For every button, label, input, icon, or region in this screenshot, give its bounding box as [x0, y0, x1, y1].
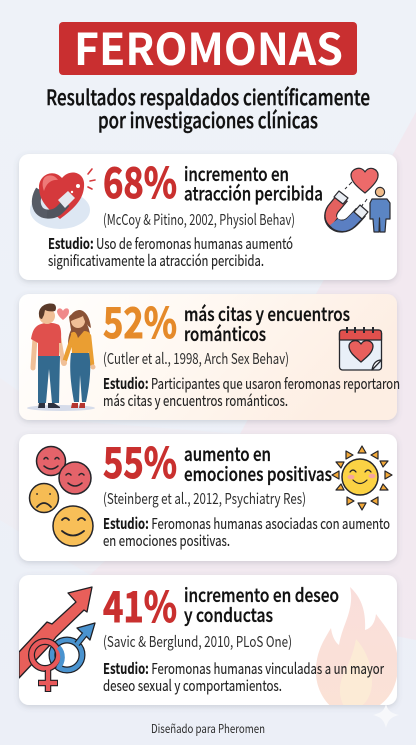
- subtitle: por investigaciones clínicas: [98, 105, 318, 135]
- heading: incremento en deseo: [184, 581, 339, 608]
- icon: magnet attracting heart to person: [331, 168, 390, 232]
- citation: (Steinberg et al., 2012, Psychiatry Res): [103, 488, 306, 509]
- study text: significativamente la atracción percibida.: [48, 250, 264, 271]
- stat: 55%: 55%: [103, 430, 177, 491]
- stat: 41%: 41%: [103, 574, 177, 635]
- study text: [103, 513, 390, 551]
- study text: deseo sexual y comportamientos.: [103, 675, 282, 696]
- panel: emociones positivas: [19, 430, 397, 561]
- heading: aumento en: [184, 440, 271, 467]
- heading: [184, 581, 339, 628]
- heading: y conductas: [184, 601, 273, 628]
- footer: Diseñado para Pheromen: [151, 720, 265, 737]
- panel: atracción percibida: [19, 150, 397, 280]
- heading: románticos: [184, 320, 266, 347]
- heading: [184, 440, 332, 487]
- heading: emociones positivas: [184, 460, 332, 487]
- citation: (Cutler et al., 1998, Arch Sex Behav): [103, 348, 289, 369]
- citation: (Savic & Berglund, 2010, PLoS One): [103, 631, 292, 652]
- stat: 68%: 68%: [103, 150, 177, 211]
- icon: couple holding hands: [27, 304, 96, 411]
- citation: (McCoy & Pitino, 2002, Physiol Behav): [103, 209, 295, 230]
- icon: mood faces: [30, 446, 93, 546]
- icon: calendar with heart: [340, 327, 382, 370]
- study text: [48, 233, 293, 271]
- icon: smiling sun: [332, 446, 392, 510]
- panel: deseo y conductas: [19, 574, 398, 710]
- study text: más citas y encuentros románticos.: [103, 390, 288, 411]
- study text: [103, 373, 400, 411]
- man: [31, 304, 63, 408]
- icon: sparkle: [373, 704, 399, 728]
- study text: [103, 658, 384, 696]
- icon: faint flame: [316, 587, 398, 710]
- icon: heart with magnet: [30, 169, 95, 229]
- heading: atracción percibida: [184, 180, 323, 206]
- woman: [30, 310, 96, 408]
- study text: Estudio: Uso de feromonas humanas aumentó: [48, 233, 293, 254]
- title banner: FEROMONAS: [74, 14, 343, 78]
- stat: 52%: 52%: [103, 290, 177, 351]
- heading: más citas y encuentros: [184, 300, 350, 327]
- heading: [184, 300, 350, 347]
- icon: rising arrow and gender symbols: [19, 587, 95, 692]
- heading: [184, 160, 323, 206]
- heading: incremento en: [184, 160, 289, 187]
- study text: en emociones positivas.: [103, 530, 230, 551]
- panel: citas y encuentros: [19, 290, 400, 420]
- subtitle: [46, 82, 370, 135]
